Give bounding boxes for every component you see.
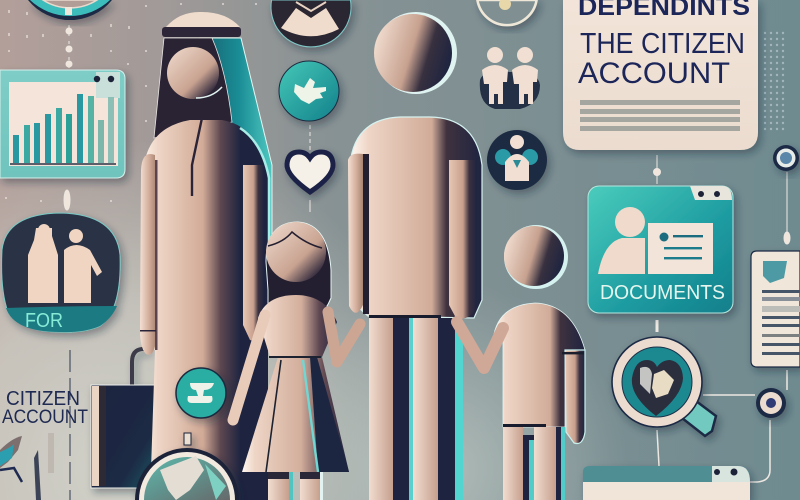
hair <box>266 222 331 318</box>
icon: two people <box>28 224 102 303</box>
icon: ring node top right <box>773 145 799 171</box>
hood: teal back <box>200 38 272 290</box>
title text: THE CITIZEN <box>580 28 745 60</box>
icon: small bottom-left marks <box>0 433 54 500</box>
headcap <box>166 12 240 27</box>
dot pattern: left <box>5 3 257 202</box>
hood: dark front <box>154 38 232 138</box>
FOR label: FOR <box>25 310 63 332</box>
arm right <box>565 350 585 444</box>
bars <box>13 94 114 165</box>
text: citizen account: CITIZEN <box>6 388 80 410</box>
head <box>374 12 457 94</box>
figure: mother <box>140 12 272 500</box>
title text <box>578 0 750 90</box>
figure: girl <box>233 222 360 500</box>
right arm <box>243 165 264 340</box>
panel: right document <box>751 251 800 367</box>
torso <box>350 117 482 318</box>
icon: bag <box>91 349 155 488</box>
waist <box>503 424 546 427</box>
figure: boy <box>457 225 585 500</box>
documents label: DOCUMENTS <box>600 282 725 304</box>
right arm <box>449 160 477 319</box>
arm right <box>328 312 360 362</box>
panel: bottom browser window <box>583 466 750 500</box>
icon: magnifier with heart <box>612 337 716 436</box>
bodice <box>258 295 337 357</box>
chart paper <box>9 82 118 166</box>
head <box>167 47 222 99</box>
arm to father <box>457 322 503 368</box>
icon: teal hand button <box>279 61 339 121</box>
icon: top avatar circle <box>271 0 351 47</box>
text: citizen account <box>2 388 88 428</box>
dress <box>242 357 349 472</box>
figure: father <box>348 12 482 500</box>
torso <box>493 303 585 427</box>
teal outline <box>240 128 269 292</box>
legs <box>503 427 523 500</box>
head <box>266 222 326 282</box>
icon: top left ring <box>28 0 112 20</box>
panel: title card <box>563 0 758 150</box>
panel: bar chart window <box>0 70 125 178</box>
left arm <box>348 154 363 313</box>
icon: globe <box>135 433 239 500</box>
id card <box>648 223 713 274</box>
collar line <box>192 118 202 196</box>
panel: documents card <box>588 186 733 313</box>
placeholder text lines <box>580 100 740 131</box>
icon: heart <box>287 152 333 192</box>
text: citizen account: ACCOUNT <box>2 407 88 428</box>
icon: top right medal <box>477 0 537 25</box>
legs <box>369 318 393 500</box>
arm left <box>233 315 265 420</box>
person <box>598 207 645 274</box>
head <box>504 225 568 289</box>
icon: teal round button on robe <box>176 368 226 418</box>
panel: FOR badge <box>2 213 120 332</box>
legs <box>268 472 289 500</box>
robe and shoulders <box>143 120 268 500</box>
title text: ACCOUNT <box>578 57 730 90</box>
head band <box>162 27 241 37</box>
icon: node on path <box>756 388 786 418</box>
icon: family circle <box>487 130 547 190</box>
dot pattern: right of title panel <box>762 30 786 132</box>
icon: two small people <box>480 47 540 109</box>
left arm <box>140 154 156 355</box>
